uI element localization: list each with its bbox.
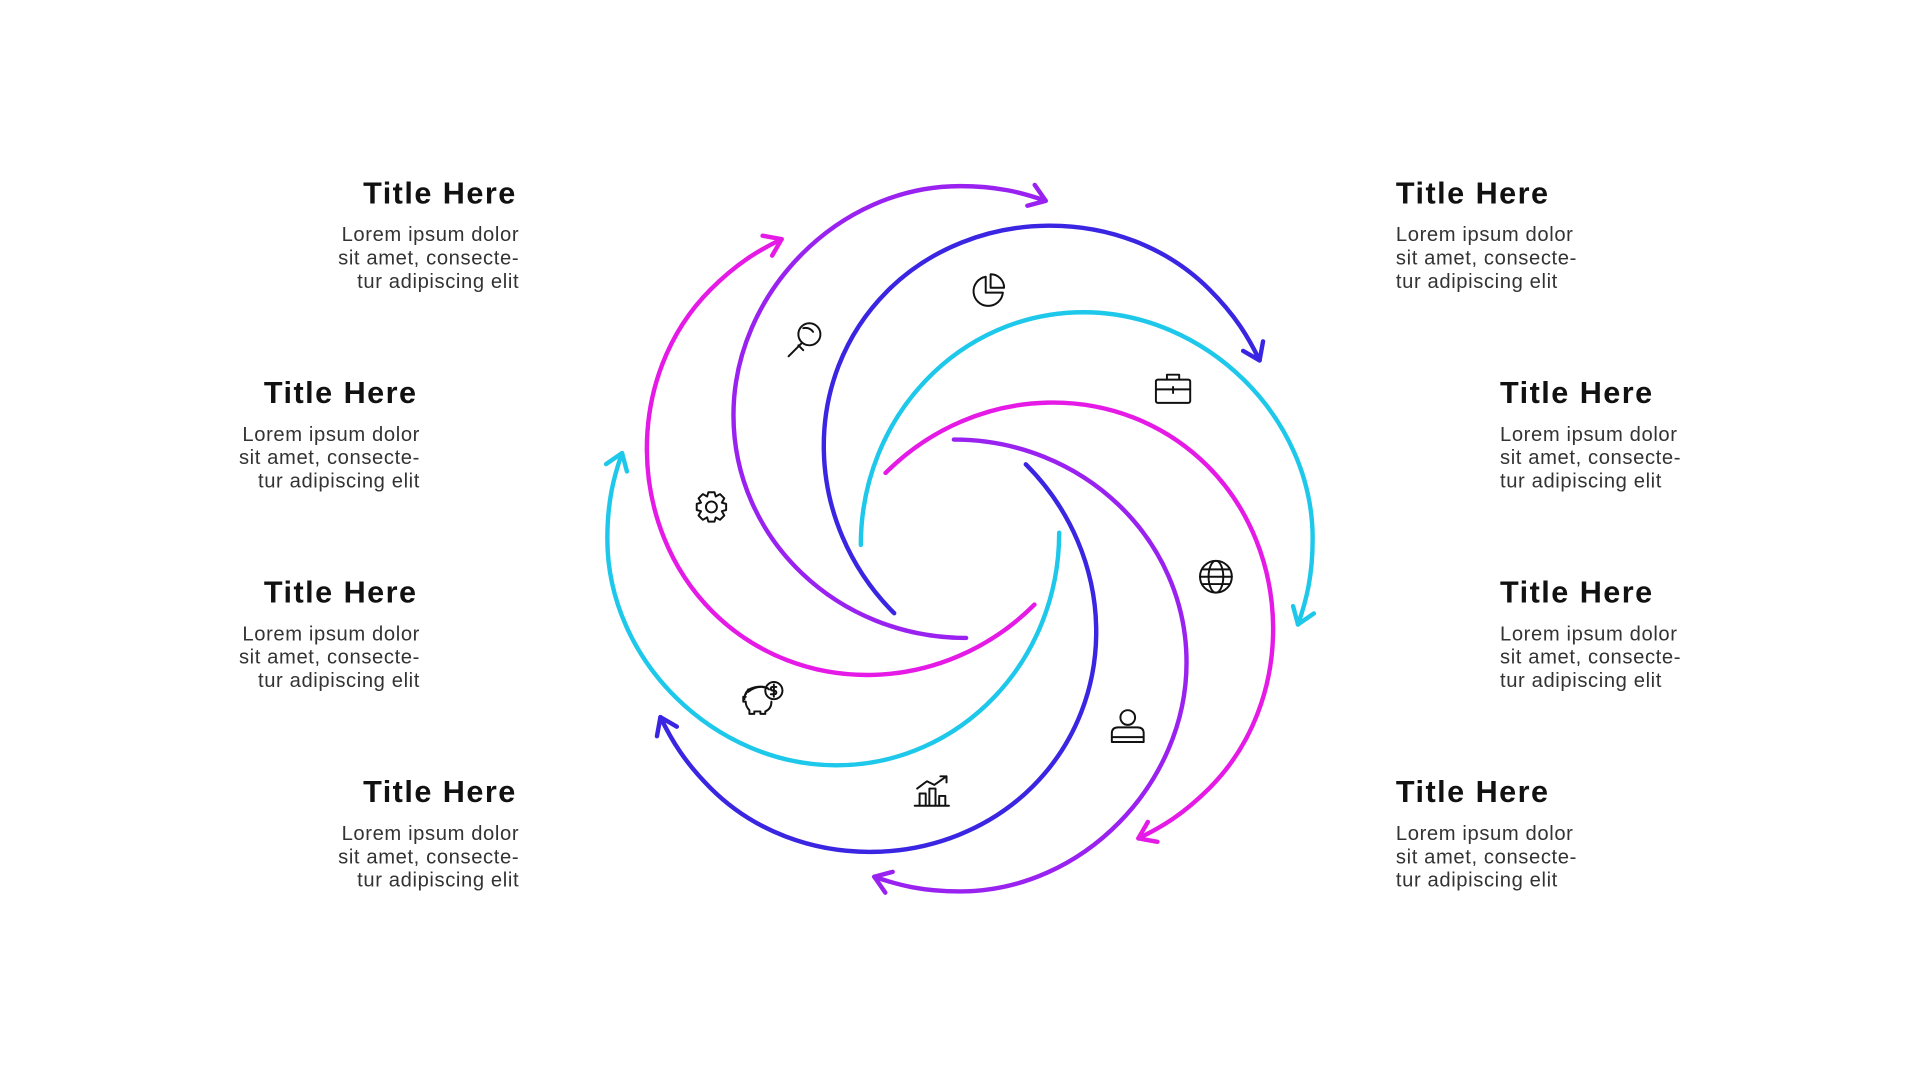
text block: mid-upper right: sit amet, consecte- xyxy=(1500,447,1681,469)
arm 3 purple xyxy=(874,440,1187,893)
text block: mid-lower left: Lorem ipsum dolor xyxy=(242,623,420,645)
text block: top left: sit amet, consecte- xyxy=(338,247,519,269)
text block: bottom right: Lorem ipsum dolor xyxy=(1396,823,1574,845)
icon: chart xyxy=(915,776,949,806)
icon: briefcase xyxy=(1156,375,1190,403)
text block: mid-upper right xyxy=(1500,376,1681,492)
text block: mid-lower right: tur adipiscing elit xyxy=(1500,670,1662,692)
text block: mid-upper left xyxy=(239,376,420,492)
text block: bottom left: tur adipiscing elit xyxy=(357,870,519,892)
text block: mid-lower left: Title Here xyxy=(264,575,418,609)
arm 6 magenta xyxy=(550,228,1091,769)
text block: mid-upper right: Lorem ipsum dolor xyxy=(1500,424,1678,446)
text block: bottom right: tur adipiscing elit xyxy=(1396,870,1558,892)
arm 1 cyan xyxy=(861,312,1314,624)
text block: mid-upper left: Title Here xyxy=(264,376,418,410)
text block: mid-lower left: sit amet, consecte- xyxy=(239,647,420,669)
icon: person xyxy=(1112,710,1144,742)
icon: globe xyxy=(1200,561,1232,593)
icon: magnifier xyxy=(789,323,820,356)
text block: bottom left xyxy=(338,775,519,892)
text block: bottom left: Title Here xyxy=(363,775,517,809)
text block: mid-lower right xyxy=(1500,575,1681,692)
arm 2 magenta xyxy=(829,308,1370,850)
text block: top right: tur adipiscing elit xyxy=(1396,271,1558,293)
text block: mid-lower right: sit amet, consecte- xyxy=(1500,647,1681,669)
text block: mid-upper left: tur adipiscing elit xyxy=(258,470,420,492)
text block: top right: Lorem ipsum dolor xyxy=(1396,224,1574,246)
text block: mid-upper left: Lorem ipsum dolor xyxy=(242,424,420,446)
text block: top left: Title Here xyxy=(363,176,517,210)
text block: bottom right xyxy=(1396,775,1577,892)
text block: top right: Title Here xyxy=(1396,176,1550,210)
text block: mid-lower right: Title Here xyxy=(1500,575,1654,609)
text block: mid-lower left: tur adipiscing elit xyxy=(258,670,420,692)
text block: mid-upper right: Title Here xyxy=(1500,376,1654,410)
text block: mid-upper right: tur adipiscing elit xyxy=(1500,470,1662,492)
text block: top right xyxy=(1396,176,1577,293)
text block: mid-lower right: Lorem ipsum dolor xyxy=(1500,623,1678,645)
text block: bottom right: sit amet, consecte- xyxy=(1396,846,1577,868)
arm 8 blue xyxy=(730,128,1271,670)
spiral diagram xyxy=(550,128,1370,949)
text block: top left: Lorem ipsum dolor xyxy=(342,224,519,246)
arm 7 purple xyxy=(733,185,1046,638)
text block: top right: sit amet, consecte- xyxy=(1396,247,1577,269)
arm 5 cyan xyxy=(606,453,1059,765)
text block: bottom left: Lorem ipsum dolor xyxy=(342,823,519,845)
icon: piggy bank xyxy=(743,682,782,714)
text block: mid-upper left: sit amet, consecte- xyxy=(239,447,420,469)
icon: pie chart xyxy=(974,274,1004,306)
arm 4 blue xyxy=(649,408,1190,949)
text block: mid-lower left xyxy=(239,575,420,692)
text block: top left xyxy=(338,176,519,293)
icon: gear xyxy=(697,492,726,522)
text block: top left: tur adipiscing elit xyxy=(357,271,519,293)
text block: bottom right: Title Here xyxy=(1396,775,1550,809)
text block: bottom left: sit amet, consecte- xyxy=(338,846,519,868)
